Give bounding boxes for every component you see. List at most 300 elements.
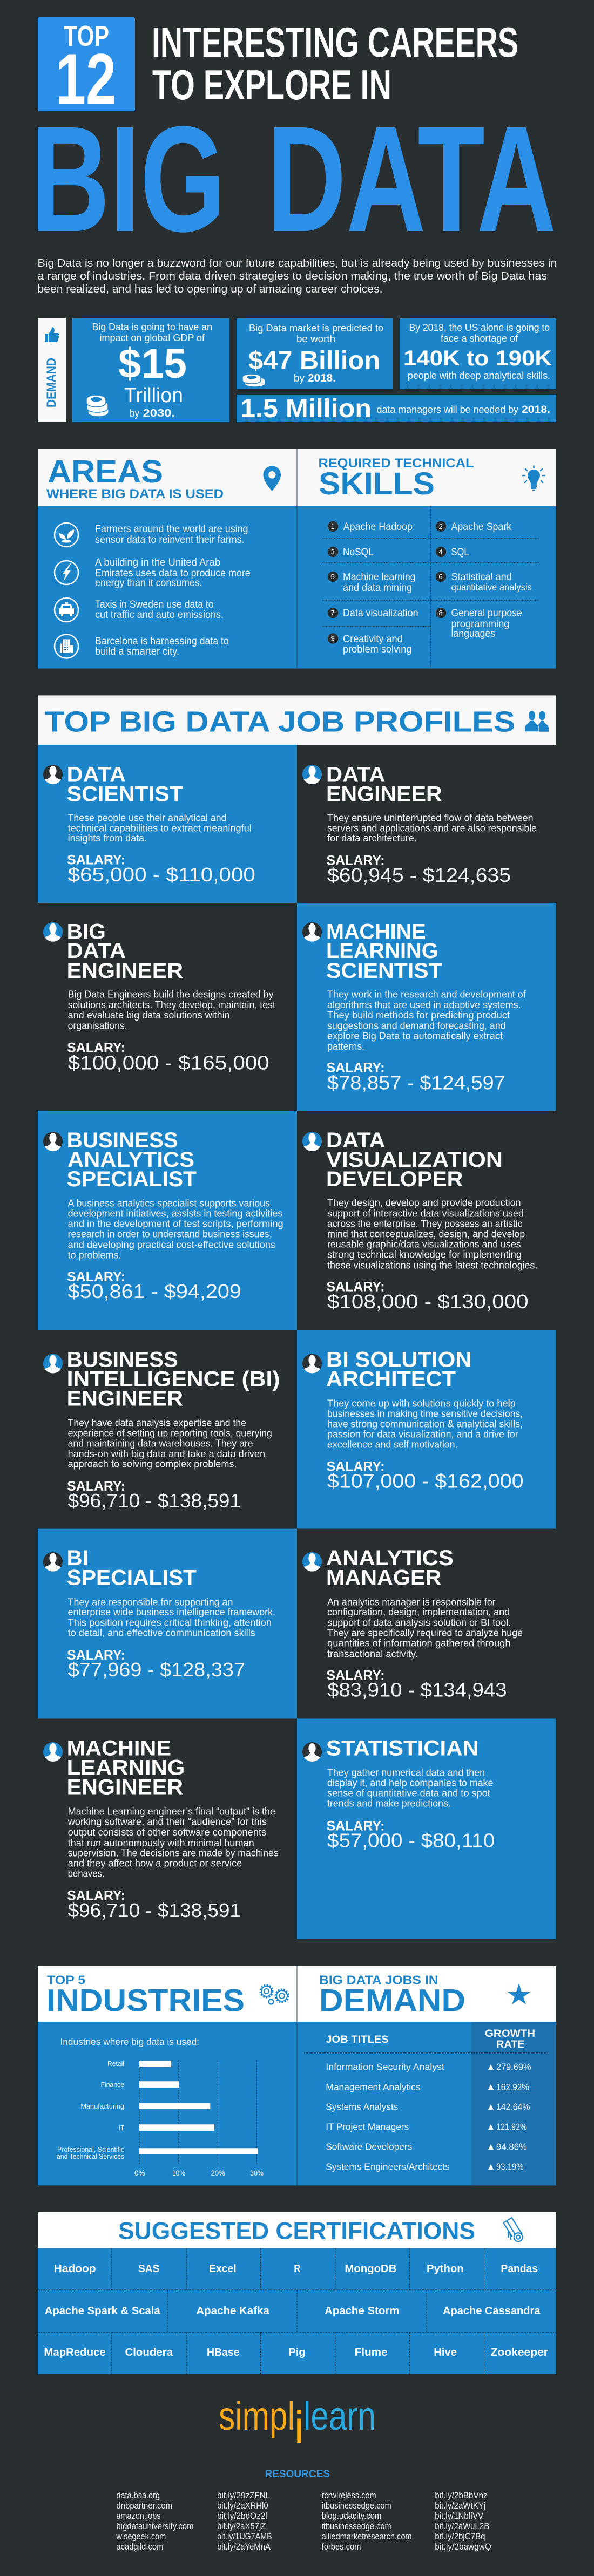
stat card: 140k to 190k: By 2018, the US alone is going to [409,322,550,333]
salary [326,1819,495,1851]
salary: $96,710 - $138,591 [68,1899,241,1921]
description: suggestions and demand forecasting, and [327,1020,505,1031]
bar chart: industries: 10% [172,2169,185,2177]
job title: LEARNING [67,1756,185,1779]
table row: information security analyst: Information Security Analyst [326,2062,444,2072]
icon: avatar [302,1742,322,1762]
resources column 1 [116,2490,193,2552]
description: technical capabilities to extract meaningful [68,822,252,833]
area item: taxis in Sweden: Taxis in Sweden use data to [95,599,214,610]
description: They ensure uninterrupted flow of data between [327,812,534,823]
description [68,1596,275,1639]
description: excellence and self motivation. [327,1438,457,1450]
icon: people row [241,417,554,422]
bar chart: industries: 30% [250,2169,264,2177]
intro text: Big Data is no longer a buzzword for our future capabilities, but is already being used by businesses in [38,257,557,269]
salary: SALARY: [326,1668,384,1683]
description: A business analytics specialist supports various [68,1198,270,1209]
description: support of data analysis solution or BI tool. [327,1617,511,1628]
stat card: 1.5 million: 2018. [522,404,550,416]
skill 6 [436,571,532,593]
resources column 3 [322,2490,412,2552]
badge: top 12 [38,17,135,119]
heading: areas [46,454,224,501]
skill 4: 4 [438,548,443,556]
bar chart: industries: 0% [134,2169,145,2177]
icon: avatar [302,1552,322,1572]
skill 5: and data mining [343,582,412,594]
skill 6: quantitative analysis [451,582,532,593]
description: They design, develop and provide production [327,1197,521,1208]
resources column 4: bit.ly/2bBbVnz [435,2490,488,2500]
icon: avatar [43,1552,63,1572]
certification row 3: Cloudera [125,2346,173,2358]
salary: $65,000 - $110,000 [68,864,255,886]
job title: INTELLIGENCE (BI) [67,1367,280,1391]
job title [326,1129,503,1191]
table header: RATE [496,2038,525,2050]
table row: information security analyst: 279.69% [496,2062,531,2072]
description: to problems. [68,1249,121,1261]
stat card: 47 billion: Big Data market is predicted to [249,322,383,334]
salary: SALARY: [326,853,384,868]
salary: $78,857 - $124,597 [327,1072,505,1093]
salary [67,853,255,886]
icon: avatar [43,1742,63,1762]
job title [67,920,183,983]
table header: GROWTH [485,2028,535,2040]
certification row 1: Excel [209,2262,237,2275]
bar chart: industries: Professional, Scientific [57,2145,125,2153]
description: They come up with solutions quickly to help [327,1398,516,1409]
description: for data architecture. [327,832,417,844]
job card: bi solution architect [297,1330,556,1529]
intro text: been realized, and has led to opening up of amazing career choices. [38,283,383,295]
salary: SALARY: [326,1459,384,1474]
icon: people [525,710,549,732]
bar chart: industries: Manufacturing [80,2102,124,2110]
demand sidebar [38,318,66,422]
job title: MANAGER [326,1566,441,1589]
area item: Barcelona: Barcelona is harnessing data to [95,635,229,647]
resources column 3: blog.udacity.com [322,2511,381,2521]
description: They have data analysis expertise and the [68,1417,246,1429]
job title: BI [67,1546,89,1570]
salary: $83,910 - $134,943 [327,1678,507,1701]
resources column 4: bit.ly/2bjC7Bq [435,2531,485,2541]
logo: simplilearn: simpl [219,2394,295,2438]
table row: systems engineers: Systems Engineers/Architects [326,2161,450,2172]
certification row 1: SAS [138,2262,159,2275]
area item: taxis in Sweden [55,598,224,622]
job title: ENGINEER [67,1387,183,1411]
job title [326,1348,472,1391]
label: demand: DEMAND [44,358,59,407]
job title: LEARNING [326,939,438,963]
area item: farmers: Farmers around the world are using [95,523,248,535]
skill 7: Data visualization [343,607,418,619]
icon: avatar [43,1354,63,1373]
job card: big data engineer [38,903,297,1111]
salary [326,1060,505,1093]
description [68,1806,279,1879]
description [327,1766,493,1809]
skills grid lines [323,506,539,668]
bar chart: industries: IT [119,2124,124,2132]
intro text: a range of industries. From data driven strategies to decision making, the true worth of Big Data has [38,270,547,282]
resources column 2: bit.ly/29zZFNL [217,2490,270,2500]
description: Machine Learning engineer’s final “output” is the [68,1806,275,1817]
table row: information security analyst [326,2062,531,2072]
icon: people row [402,384,554,389]
skill 3: NoSQL [343,546,374,558]
description: research in order to understand business issues, [68,1228,272,1239]
icon: avatar [302,1132,322,1151]
salary: SALARY: [67,1479,125,1494]
salary: $96,710 - $138,591 [68,1490,241,1512]
certification row 2: Apache Spark & Scala [45,2305,160,2317]
job title: ENGINEER [67,959,183,983]
description: hands-on with big data and take a data driven [68,1448,265,1459]
description: and in the development of test scripts, performing [68,1218,284,1229]
stat card: 15 trillion: $15 [118,341,187,387]
stat card: 47 billion: 2018. [308,372,336,384]
resources column 4: bit.ly/2bawgwQ [435,2541,491,2552]
badge: top 12: TOP [64,20,109,52]
resources column 2: bit.ly/2aX57jZ [217,2521,266,2531]
icon: avatar [43,1132,63,1151]
bar chart: industries [57,2060,264,2177]
description: servers and applications and are also responsible [327,822,537,833]
description: reusable graphic/data visualizations and uses [327,1239,521,1250]
panel: big data jobs in demand [297,1966,556,2185]
job card: business analytics specialist [38,1111,297,1330]
icon: avatar [302,922,322,942]
job title: DATA [326,763,386,787]
description: trends and make predictions. [327,1798,451,1809]
job card: bi specialist [38,1529,297,1718]
job title: SCIENTIST [67,782,183,806]
description: strong technical knowledge for implementing [327,1249,522,1260]
skill 3: 3 [331,548,335,556]
job title [326,920,442,983]
icon: thumbs up [45,327,59,342]
heading: skills [319,456,474,501]
description [327,1596,523,1659]
description [327,1398,523,1450]
area item: farmers: sensor data to reinvent their farms. [95,534,244,546]
description [68,1198,284,1261]
intro text [38,257,557,295]
salary [67,1648,245,1681]
salary: SALARY: [326,1060,384,1075]
description: They gather numerical data and then [327,1766,485,1778]
stat card: 140k to 190k [400,318,556,389]
skill 8: 8 [438,609,443,617]
table header: JOB TITLES [326,2034,389,2045]
job title: DATA [67,763,126,787]
description: explore Big Data to automatically extract [327,1030,503,1042]
job title: ENGINEER [67,1776,183,1799]
certification row 3: MapReduce [44,2346,106,2358]
skill 8: languages [451,628,495,640]
bar chart: industries: and Technical Services [57,2152,124,2160]
panel: required technical skills [297,449,556,669]
area item: building in UAE: energy than it consumes. [95,577,202,589]
description: sense of quantitative data and to spot [327,1787,490,1799]
certification row 1: Pandas [501,2262,538,2275]
bar chart: industries: Finance [101,2081,124,2089]
area item: Barcelona [55,635,229,658]
job title: ANALYTICS [326,1546,454,1570]
description: mind that conceptualizes, design, and develop [327,1228,525,1239]
certification row 3: Hive [434,2346,457,2358]
salary [326,1459,524,1492]
description: quantities of information gathered through [327,1637,511,1648]
skill 8: General purpose [451,607,522,619]
description: supervision. The decisions are made by machines [68,1847,279,1859]
description [68,812,252,844]
description: transactional activity. [327,1648,418,1659]
job title: STATISTICIAN [326,1736,479,1760]
resources heading: RESOURCES [265,2468,330,2480]
certification row 3: Pig [289,2346,305,2358]
salary: $60,945 - $124,635 [327,864,511,886]
description: across the enterprise. They possess an artistic [327,1218,522,1229]
bar chart: industries: Retail [107,2060,124,2068]
heading: suggested certifications: SUGGESTED CERTIFICATIONS [118,2218,475,2244]
icon: star [508,1983,530,2004]
icon: avatar [43,922,63,942]
icon: diploma [500,2218,525,2245]
certification row 3: Flume [355,2346,388,2358]
certification row 2 [45,2305,541,2317]
table row: it project managers: 121.92% [496,2121,527,2132]
description: and evaluate big data solutions within [68,1009,230,1021]
description: working software, and their “audience” for this [68,1816,267,1827]
stat card: 15 trillion: Big Data is going to have an [92,321,212,332]
description: Big Data Engineers build the designs created by [68,988,274,1000]
job title: DATA [67,939,126,963]
resources column 1: data.bsa.org [116,2490,160,2500]
panel: areas where big data is used [38,449,297,669]
job card: business intelligence engineer [38,1330,297,1529]
stat card: 1.5 million [237,395,556,423]
description: output consists of other software components [68,1826,266,1838]
job card: data engineer [297,745,556,903]
description: approach to solving complex problems. [68,1458,237,1470]
description: An analytics manager is responsible for [327,1596,496,1607]
certification row 1 [54,2262,538,2275]
area item: farmers [55,523,248,547]
icon: avatar [302,765,322,784]
resources column 2: bit.ly/2aXRHl0 [217,2500,268,2511]
job title: MACHINE [67,1736,171,1760]
table row: management analytics [326,2082,529,2092]
heading: demand: BIG DATA JOBS IN [319,1973,438,1987]
description: and maintaining data warehouses. They are [68,1437,253,1449]
description: and developing practical cost-effective solutions [68,1239,275,1250]
job title: BUSINESS [67,1129,178,1152]
description: behaves. [68,1867,105,1879]
icon: coins [242,374,265,387]
job card: machine learning scientist [297,903,556,1111]
icon: avatar [302,1354,322,1373]
table row: systems engineers: 93.19% [496,2161,524,2172]
heading: industries: TOP 5 [47,1973,85,1987]
job title [67,1736,185,1799]
certification row 1: Python [427,2262,464,2275]
description: display it, and help companies to make [327,1777,493,1788]
table row: software developers: Software Developers [326,2142,413,2152]
description: This position requires critical thinking, attention [68,1617,272,1628]
salary: $57,000 - $80,110 [327,1830,495,1851]
certification row 3: HBase [207,2346,239,2358]
description: They build methods for predicting product [327,1009,510,1021]
resources column 4 [435,2490,491,2552]
stat card: 15 trillion: 2030. [143,407,175,419]
heading panel: top big data job profiles [38,695,556,745]
description [68,1417,272,1470]
description: experience of setting up reporting tools, querying [68,1427,272,1439]
resources column 2 [217,2490,272,2552]
skill 5 [328,571,416,594]
skill 8: programming [451,618,510,630]
heading: to explore in: TO EXPLORE IN [152,61,392,108]
icon: light bulb [523,466,545,491]
heading: areas: AREAS [48,454,163,490]
skill 9: 9 [331,635,335,642]
stat card: 47 billion [237,318,393,389]
skill 9 [328,633,411,655]
logo: simplilearn: i [294,2402,304,2452]
salary: SALARY: [67,1269,125,1284]
stat card: 1.5 million: 1.5 Million [240,395,372,423]
job title: ENGINEER [326,782,442,806]
job title [67,1348,280,1411]
skill 1: 1 [331,522,335,531]
stat card: 47 billion: be worth [296,333,335,344]
icon: coins [86,395,109,417]
certification row 3 [44,2346,548,2358]
job card: machine learning engineer [38,1718,297,1939]
salary: SALARY: [326,1819,384,1834]
job card: analytics manager [297,1529,556,1718]
resources column 1: amazon.jobs [116,2511,160,2521]
table row: management analytics: Management Analytics [326,2082,421,2092]
job title [67,763,183,806]
skill 7: 7 [331,609,335,617]
certification row 1: MongoDB [345,2262,396,2275]
resources column 3: itbusinessedge.com [322,2500,392,2511]
bar chart: industries: 20% [211,2169,225,2177]
job title [67,1129,197,1191]
table header [304,2028,548,2053]
salary [326,1668,507,1701]
resources column 2: bit.ly/1UG7AMB [217,2531,272,2541]
description: these visualizations using the latest technologies. [327,1260,537,1270]
table row: systems analysts: Systems Analysts [326,2102,399,2112]
heading: big data: BIG [30,95,226,263]
table row: it project managers: IT Project Managers [326,2121,409,2132]
certification row 1: Hadoop [54,2262,96,2275]
table row: systems analysts [326,2102,530,2112]
description: These people use their analytical and [68,812,226,823]
job title: SCIENTIST [326,959,442,983]
heading: demand: DEMAND [319,1983,465,2018]
description: that run autonomously with minimal human [68,1837,254,1848]
resources column 1: wisegeek.com [116,2531,166,2541]
table row: management analytics: 162.92% [496,2082,529,2092]
job title: VISUALIZATION [326,1148,503,1172]
chart caption: Industries where big data is used: [60,2036,199,2047]
area item: building in UAE: A building in the United Arab [95,556,220,568]
stat card: 140k to 190k: 140K to 190K [403,346,552,370]
resources column 3: rcrwireless.com [322,2490,376,2500]
stat card: 47 billion: $47 Billion [248,346,380,375]
salary: SALARY: [67,853,125,868]
description: algorithms that are used in adaptive systems. [327,999,521,1010]
table row: systems engineers [326,2161,524,2172]
description [327,812,537,844]
area item: building in UAE [55,556,251,589]
resources column 3: itbusinessedge.com [322,2521,392,2531]
description: and they affect how a product or service [68,1858,242,1869]
resources column 2: bit.ly/2bdOz2l [217,2511,267,2521]
resources column 4: bit.ly/1NblfVV [435,2511,484,2521]
certification row 2: Apache Kafka [196,2305,269,2317]
skill 2: 2 [438,522,443,531]
description: solutions architects. They develop, maintain, test [68,999,275,1010]
description [327,1197,537,1270]
heading: areas: WHERE BIG DATA IS USED [46,487,224,501]
description: They are responsible for supporting an [68,1596,233,1607]
certification row 3: Zookeeper [490,2346,548,2358]
job title [326,763,442,806]
salary [67,1888,241,1921]
area item: Barcelona: build a smarter city. [95,645,179,657]
description: insights from data. [68,832,147,844]
table row: systems analysts: 142.64% [496,2102,530,2112]
resources column 4: bit.ly/2aWtKYj [435,2500,485,2511]
skill 5: Machine learning [343,571,416,583]
skill 4: SQL [451,546,469,558]
resources column 2: bit.ly/2aYeMnA [217,2541,271,2552]
description: businesses in making time sensitive decisions, [327,1408,523,1419]
heading: industries: INDUSTRIES [46,1983,245,2018]
logo: simplilearn: learn [303,2394,376,2438]
salary: $107,000 - $162,000 [327,1470,524,1492]
skill 5: 5 [331,573,335,581]
certification row 2: Apache Storm [325,2305,399,2317]
heading: big data [30,95,556,263]
job title: BI SOLUTION [326,1348,472,1372]
demand stats section [38,318,556,423]
salary: SALARY: [67,1041,125,1056]
area item: taxis in Sweden: cut traffic and auto emissions. [95,609,224,621]
job title: ARCHITECT [326,1367,456,1391]
job title: BUSINESS [67,1348,178,1372]
resources column 4: bit.ly/2aWuL2B [435,2521,489,2531]
icon: avatar [43,765,63,784]
skill 8 [436,607,522,640]
salary [326,1279,529,1313]
job title: DEVELOPER [326,1167,463,1191]
salary: $100,000 - $165,000 [68,1052,269,1074]
resources list [116,2490,491,2552]
salary: SALARY: [67,1888,125,1903]
skill 6: 6 [438,573,443,581]
